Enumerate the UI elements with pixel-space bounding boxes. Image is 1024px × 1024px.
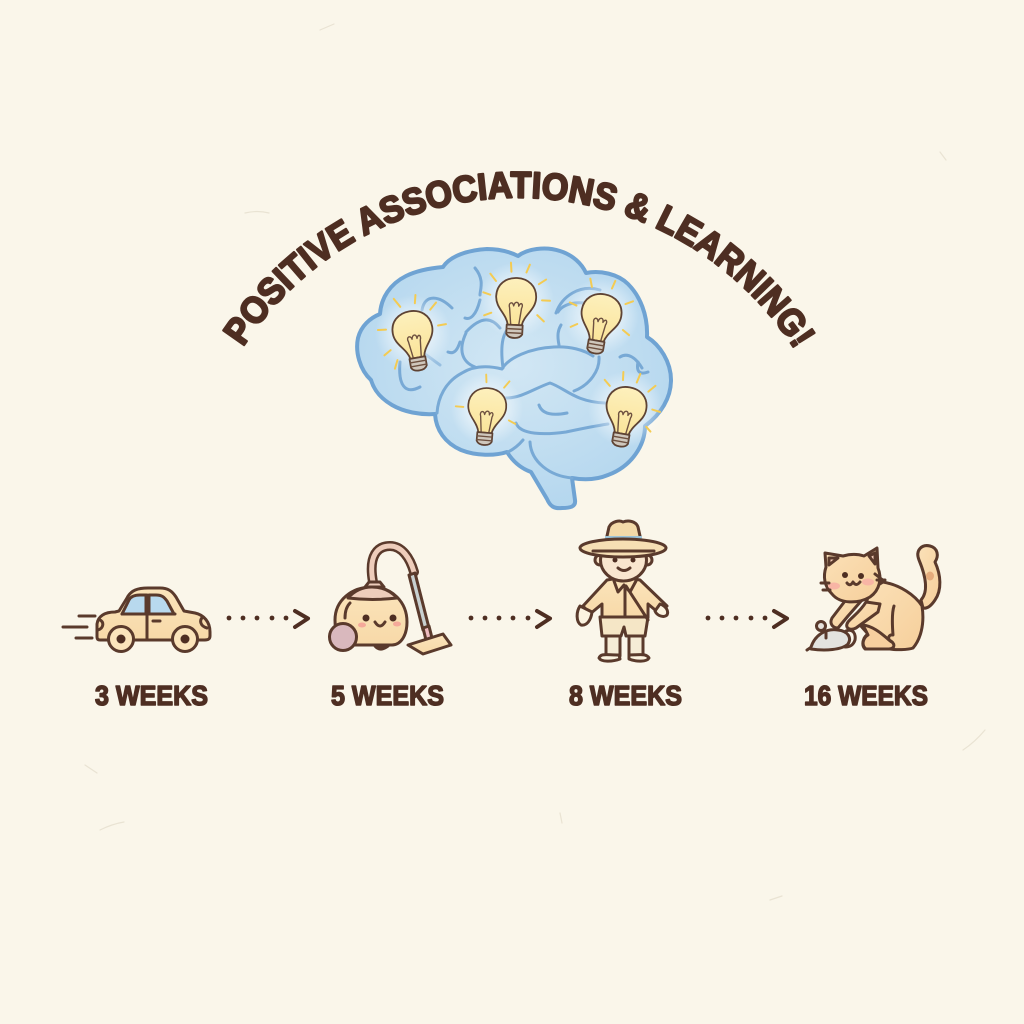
mouse toy: [811, 630, 850, 650]
car body: [97, 588, 210, 640]
vacuum hose and pole: [372, 546, 414, 582]
vacuum ball wheel: [330, 624, 356, 650]
brain outline: [357, 249, 671, 508]
cat head: [824, 548, 880, 602]
car windows: [122, 595, 174, 614]
label: 16 weeks: 16 WEEKS: [804, 680, 928, 711]
vacuum face: [362, 614, 370, 622]
icon: vacuum cleaner: [330, 546, 451, 654]
cat tail: [918, 546, 940, 608]
label: 5 weeks: 5 WEEKS: [331, 680, 444, 711]
explorer hands: [577, 604, 668, 625]
icon: brain with light bulbs: [357, 249, 671, 508]
explorer hat: [580, 521, 666, 557]
light bulb 4: [448, 370, 526, 448]
vacuum nozzle: [408, 634, 451, 654]
speed lines: [63, 616, 95, 638]
light bulb 2: [476, 260, 556, 340]
cat front legs: [831, 600, 862, 628]
arrow 1: [227, 611, 308, 627]
vacuum body: [335, 587, 407, 645]
brain folds: [400, 268, 648, 478]
explorer shorts: [600, 617, 648, 636]
label: 8 weeks: 8 WEEKS: [569, 680, 682, 711]
title: curved heading: POSITIVE ASSOCIATIONS & LEARNING!: [222, 171, 816, 348]
light bulb 3: [557, 272, 645, 360]
light bulb 1: [369, 289, 457, 377]
explorer head: [595, 539, 652, 581]
arrow 3: [706, 611, 787, 627]
explorer shoes: [599, 655, 649, 661]
arrow 2: [469, 611, 550, 627]
icon: cat with mouse: [807, 546, 940, 650]
light bulb 5: [582, 365, 670, 453]
cat body: [860, 582, 923, 650]
car wheels: [108, 626, 198, 652]
icon: explorer character: [577, 521, 668, 661]
label: 3 weeks: 3 WEEKS: [95, 680, 208, 711]
cat face: [842, 572, 848, 578]
icon: car: [63, 588, 210, 652]
explorer legs: [606, 636, 643, 656]
explorer jacket and arms: [583, 577, 667, 617]
